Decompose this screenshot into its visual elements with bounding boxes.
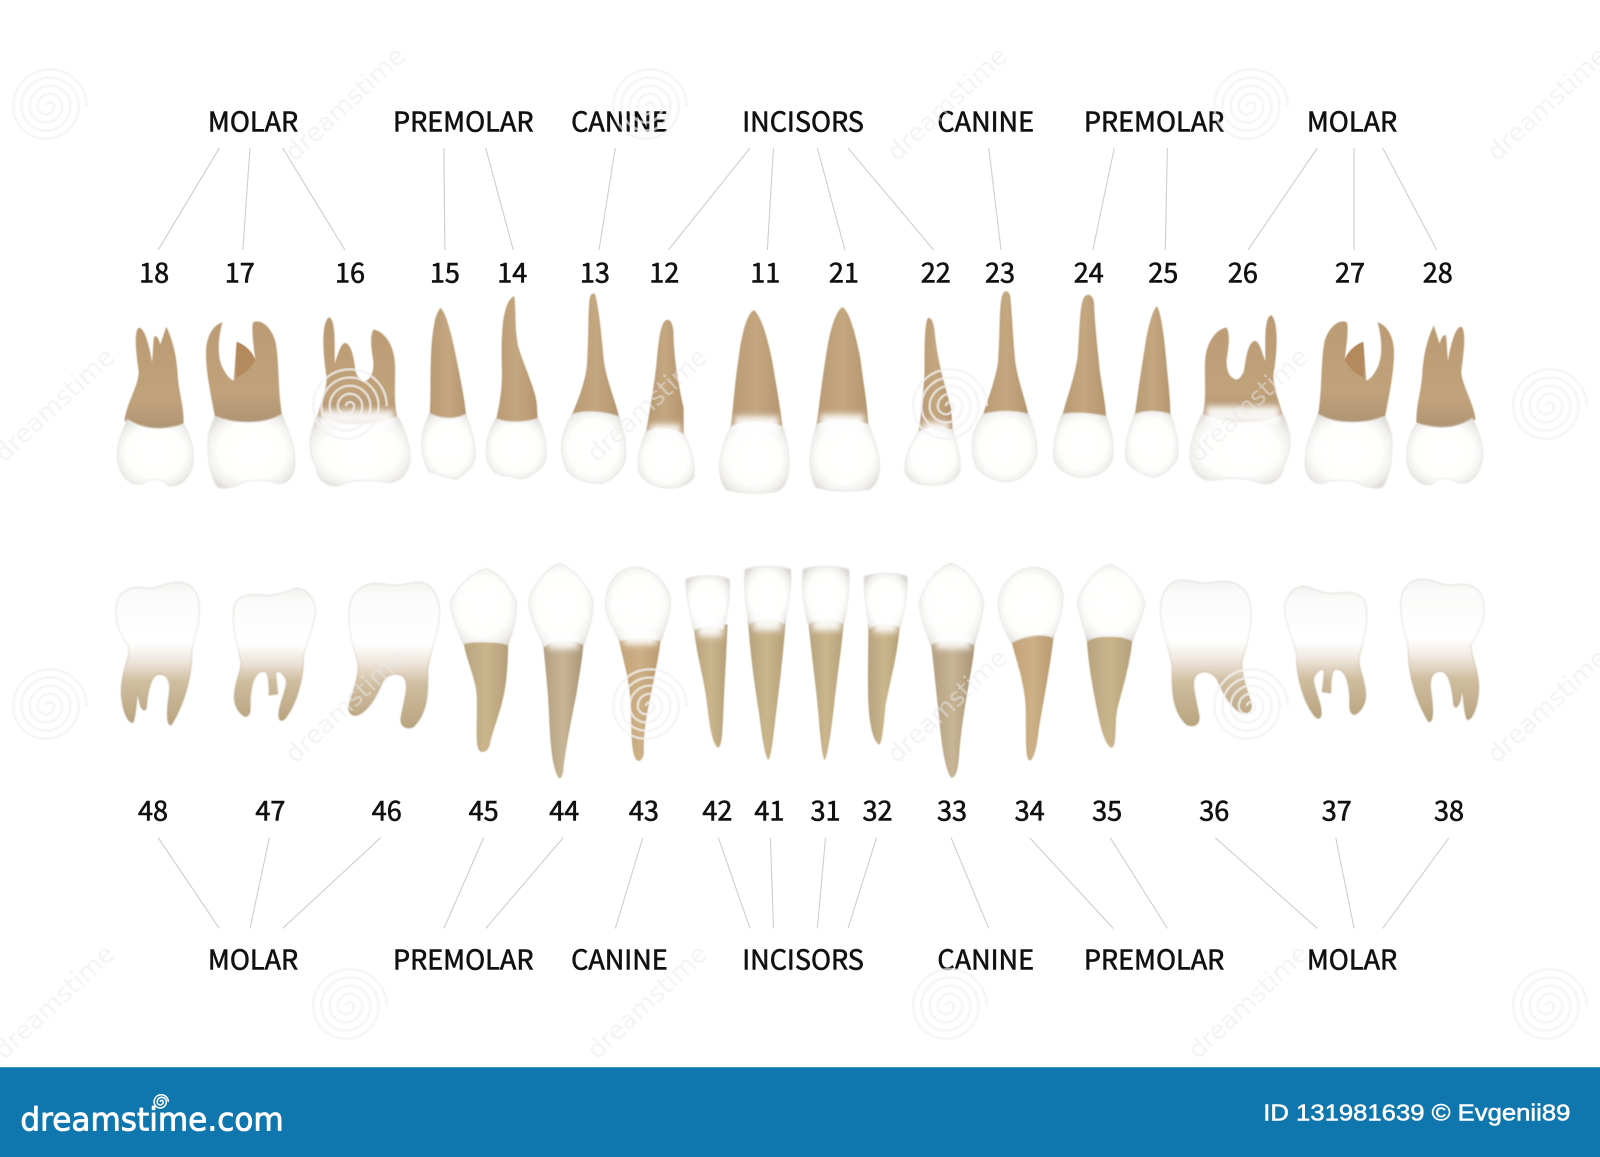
- tooth 13: [561, 293, 626, 484]
- upper tooth numbers: 15: [430, 252, 460, 291]
- watermark diagonal text: dreamstime: [881, 41, 1014, 168]
- lower tooth numbers: [138, 789, 1464, 828]
- tooth 17: [206, 321, 295, 488]
- label: canine upper right: CANINE: [937, 101, 1034, 140]
- tooth 46: [349, 582, 440, 728]
- label: premolar lower right: PREMOLAR: [1084, 938, 1224, 977]
- tooth 42: [686, 576, 730, 748]
- tooth 27: [1305, 321, 1394, 488]
- tooth 41: [745, 566, 791, 760]
- upper tooth numbers: 23: [985, 252, 1015, 291]
- lower tooth numbers: 47: [255, 789, 285, 828]
- lower tooth numbers: 41: [754, 789, 784, 828]
- lower tooth numbers: 38: [1434, 789, 1464, 828]
- watermark diagonal text: dreamstime: [581, 939, 714, 1065]
- label: premolar lower left: PREMOLAR: [393, 938, 534, 977]
- tooth 12: [638, 320, 694, 488]
- tooth 47: [233, 588, 315, 720]
- watermark diagonal text: dreamstime: [279, 643, 412, 770]
- watermark diagonal text: dreamstime: [1182, 939, 1315, 1065]
- lower tooth numbers: 32: [863, 789, 893, 828]
- lower teeth row: [116, 563, 1484, 778]
- icon: logo spiral: [154, 1095, 168, 1108]
- watermark diagonal text: dreamstime: [1182, 342, 1315, 469]
- tooth 34: [998, 567, 1063, 761]
- upper tooth numbers: 11: [750, 252, 780, 291]
- footer image id and credit: ID 131981639 © Evgenii89: [1263, 1099, 1570, 1125]
- tooth 14: [486, 296, 546, 479]
- tooth 11: [719, 310, 789, 493]
- upper tooth numbers: 25: [1148, 252, 1178, 291]
- lower tooth numbers: 34: [1015, 789, 1045, 828]
- lower category labels: [208, 938, 1397, 977]
- upper tooth numbers: 12: [649, 252, 679, 291]
- lower tooth numbers: 33: [937, 789, 967, 828]
- label: molar lower right: MOLAR: [1307, 938, 1397, 977]
- lower leader lines: [158, 838, 1449, 928]
- upper tooth numbers: 16: [335, 252, 365, 291]
- tooth 35: [1078, 564, 1145, 748]
- watermark diagonal text: dreamstime: [881, 643, 1014, 770]
- footer logo text: dreamstime.com: [20, 1102, 284, 1138]
- upper teeth row: [117, 291, 1483, 493]
- upper tooth numbers: 24: [1074, 252, 1104, 291]
- lower tooth numbers: 48: [138, 789, 168, 828]
- tooth 24: [1054, 295, 1113, 477]
- upper category labels: [208, 101, 1397, 140]
- lower tooth numbers: 46: [372, 789, 402, 828]
- upper tooth numbers: 26: [1228, 252, 1258, 291]
- lower tooth numbers: 35: [1092, 789, 1122, 828]
- tooth 43: [605, 567, 671, 761]
- tooth 21: [810, 307, 880, 491]
- label: premolar upper right: PREMOLAR: [1084, 101, 1224, 140]
- tooth 23: [972, 291, 1037, 482]
- watermark diagonal text: dreamstime: [279, 41, 412, 168]
- lower tooth numbers: 42: [702, 789, 732, 828]
- label: canine lower right: CANINE: [937, 938, 1034, 977]
- upper tooth numbers: 14: [497, 252, 527, 291]
- lower tooth numbers: 45: [469, 789, 499, 828]
- upper tooth numbers: [139, 252, 1453, 291]
- upper tooth numbers: 22: [921, 252, 951, 291]
- lower tooth numbers: 36: [1199, 789, 1229, 828]
- tooth 26: [1190, 315, 1290, 484]
- tooth 38: [1401, 579, 1484, 722]
- lower tooth numbers: 31: [811, 789, 841, 828]
- label: molar upper right: MOLAR: [1307, 101, 1397, 140]
- upper tooth numbers: 28: [1423, 252, 1453, 291]
- tooth 48: [116, 582, 199, 725]
- tooth 37: [1285, 586, 1367, 718]
- tooth 22: [905, 318, 960, 485]
- tooth 18: [117, 326, 193, 486]
- footer bar: [0, 1067, 1600, 1157]
- label: molar lower left: MOLAR: [208, 938, 298, 977]
- lower tooth numbers: 43: [629, 789, 659, 828]
- label: incisors upper: INCISORS: [742, 101, 864, 140]
- label: canine lower left: CANINE: [571, 938, 668, 977]
- tooth 25: [1126, 306, 1178, 477]
- tooth 32: [864, 573, 907, 745]
- label: molar upper left: MOLAR: [208, 101, 298, 140]
- lower tooth numbers: 44: [549, 789, 579, 828]
- lower tooth numbers: 37: [1322, 789, 1352, 828]
- upper leader lines: [158, 148, 1437, 250]
- tooth 16: [310, 317, 410, 486]
- upper tooth numbers: 18: [139, 252, 169, 291]
- tooth 15: [422, 308, 476, 480]
- label: incisors lower: INCISORS: [742, 938, 864, 977]
- tooth 28: [1407, 325, 1483, 485]
- upper tooth numbers: 17: [225, 252, 255, 291]
- upper tooth numbers: 21: [829, 252, 859, 291]
- watermark diagonal text: dreamstime: [581, 342, 714, 469]
- tooth 36: [1160, 580, 1251, 726]
- tooth 33: [919, 563, 984, 778]
- label: canine upper left: CANINE: [571, 101, 668, 140]
- tooth 31: [802, 566, 849, 760]
- tooth 45: [450, 568, 516, 752]
- upper tooth numbers: 27: [1335, 252, 1365, 291]
- label: premolar upper left: PREMOLAR: [393, 101, 534, 140]
- upper tooth numbers: 13: [580, 252, 610, 291]
- tooth 44: [529, 563, 593, 778]
